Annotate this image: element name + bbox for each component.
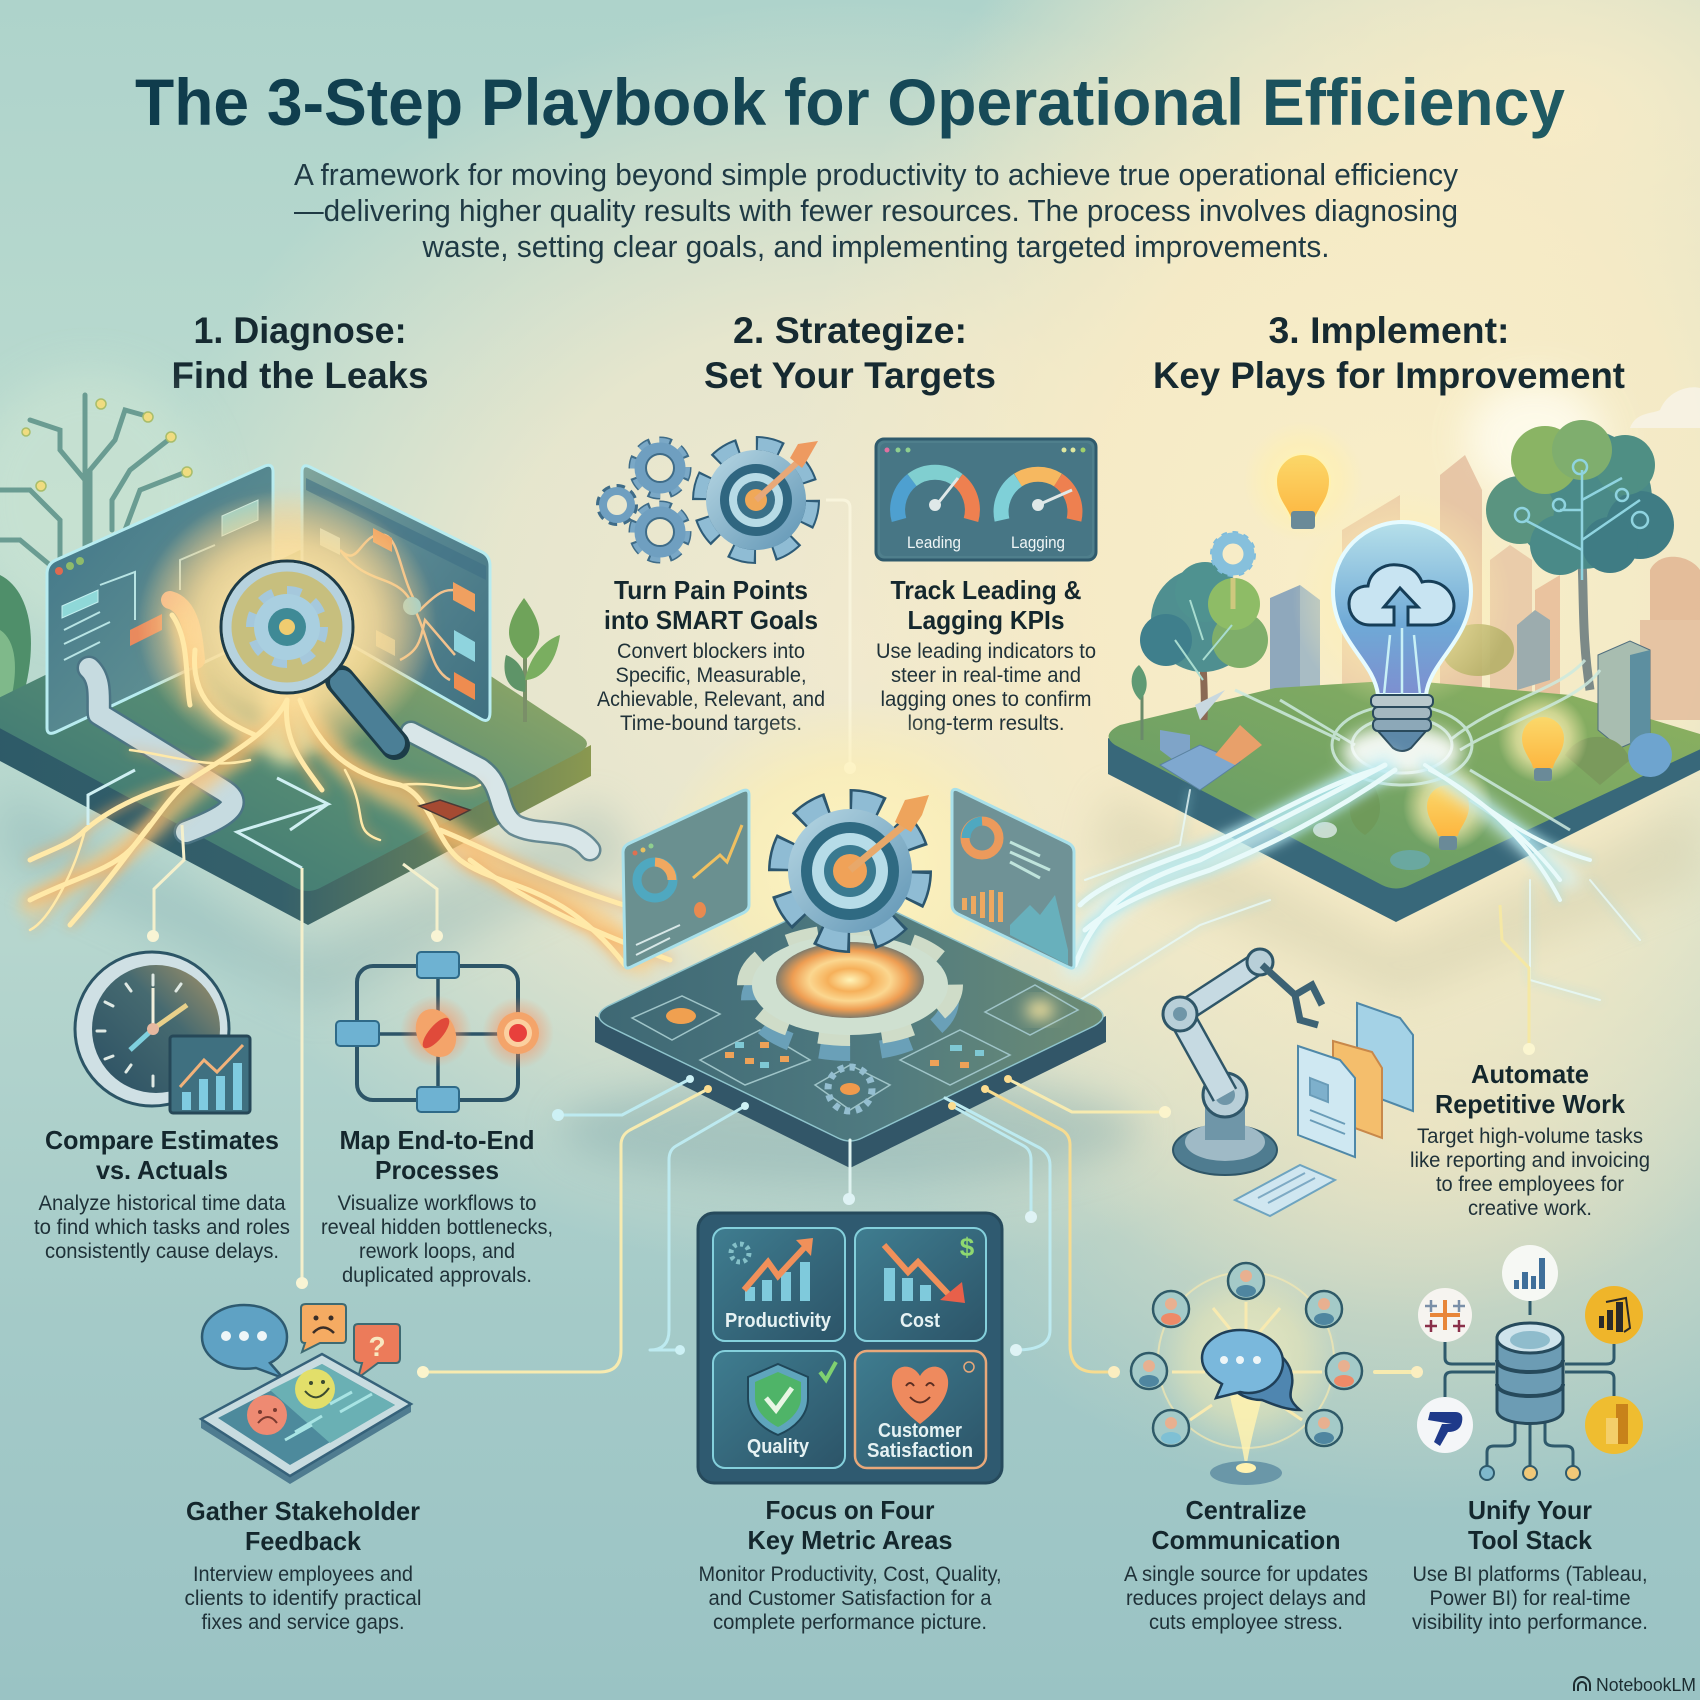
base gear — [746, 933, 954, 1052]
cell: productivity — [713, 1228, 845, 1341]
floor shadows — [0, 790, 1700, 1185]
text: unify tool stack: Unify Your — [1468, 1495, 1592, 1525]
icon: stakeholder feedback tablet: ? — [368, 1331, 386, 1362]
center platform with gear — [595, 700, 1106, 1168]
text: automate — [1410, 1059, 1650, 1220]
text: smart goals: Specific, Measurable, — [616, 664, 806, 687]
heading: step 1: Find the Leaks — [172, 355, 428, 396]
icon: leading lagging dashboard: Leading — [907, 533, 961, 552]
text: compare estimates: consistently cause delays. — [45, 1240, 279, 1263]
text: smart goals: into SMART Goals — [604, 605, 818, 635]
dashboard panel left — [623, 790, 749, 968]
lightning leaks — [30, 490, 670, 965]
connector lines step 1 — [147, 825, 443, 1289]
text: automate: Target high-volume tasks — [1417, 1125, 1643, 1148]
icon: unified tool stack — [1417, 1245, 1643, 1480]
icon: process map with bottlenecks — [336, 952, 554, 1112]
cell: customer satisfaction: Satisfaction — [867, 1440, 973, 1462]
cell: quality — [713, 1351, 845, 1468]
text: gather feedback: fixes and service gaps. — [202, 1611, 404, 1634]
heading: step 3: 3. Implement: — [1268, 310, 1510, 351]
text: map processes — [321, 1125, 553, 1287]
panel: four metric areas — [698, 1213, 1002, 1483]
intro text block: A framework for moving beyond simple productivity to achieve true operational efficiency — [294, 157, 1458, 192]
people avatars — [1131, 1263, 1362, 1446]
text: map processes: reveal hidden bottlenecks, — [321, 1216, 553, 1239]
small gear — [1215, 536, 1251, 609]
text: automate: to free employees for — [1436, 1173, 1624, 1196]
text: centralize communication: reduces project delays and — [1126, 1587, 1366, 1610]
text: compare estimates: to find which tasks and roles — [34, 1216, 290, 1239]
screen: left dashboard — [47, 465, 273, 733]
text: map processes: Processes — [375, 1155, 499, 1185]
text: map processes: Map End-to-End — [340, 1125, 534, 1155]
small bulb: bottom — [1403, 761, 1493, 851]
text: map processes: Visualize workflows to — [338, 1192, 536, 1215]
text: leading lagging kpis: Use leading indicators to — [876, 640, 1096, 663]
heading: step 2: 2. Strategize: — [733, 310, 967, 351]
text: compare estimates: Compare Estimates — [45, 1125, 279, 1155]
text: unify tool stack: Power BI) for real-time — [1430, 1587, 1630, 1610]
text: leading lagging kpis: steer in real-time and — [891, 664, 1081, 687]
text: gather feedback: Gather Stakeholder — [186, 1496, 420, 1526]
text: centralize communication: Communication — [1152, 1525, 1340, 1555]
text: four metric areas: Focus on Four — [766, 1495, 934, 1525]
connectors from center platform — [417, 1075, 1423, 1378]
text: compare estimates — [34, 1125, 290, 1263]
cell: productivity: Productivity — [725, 1310, 832, 1332]
text: smart goals: Achievable, Relevant, and — [597, 688, 825, 711]
intro text block: —delivering higher quality results with fewer resources. The process involves diagnosing — [294, 193, 1458, 228]
text: smart goals — [597, 575, 825, 735]
cell: cost: Cost — [900, 1310, 940, 1332]
text: leading lagging kpis: long-term results. — [908, 712, 1064, 735]
text: centralize communication — [1124, 1495, 1368, 1634]
text: gather feedback: clients to identify practical — [184, 1587, 422, 1610]
text: automate: creative work. — [1468, 1197, 1592, 1220]
platform: diagnose — [0, 550, 591, 925]
text: unify tool stack — [1412, 1495, 1648, 1634]
circuit lines on implement platform — [1235, 660, 1600, 840]
heading: step 1 — [172, 310, 428, 396]
text: centralize communication: Centralize — [1186, 1495, 1306, 1525]
connector: goals to gear — [826, 500, 856, 774]
text: centralize communication: cuts employee stress. — [1149, 1611, 1343, 1634]
text: leading lagging kpis: Track Leading & — [890, 575, 1082, 605]
heading: step 3: Key Plays for Improvement — [1153, 355, 1625, 396]
soft water glow — [1075, 765, 1570, 965]
cell: customer satisfaction: Customer — [878, 1420, 962, 1442]
magnifying glass — [221, 561, 395, 745]
text: leading lagging kpis: Lagging KPIs — [908, 605, 1064, 635]
cracks and circuit on platform — [88, 770, 470, 868]
text: leading lagging kpis: lagging ones to confirm — [880, 688, 1092, 711]
text: map processes: duplicated approvals. — [342, 1264, 532, 1287]
icon: stakeholder feedback tablet — [201, 1304, 411, 1484]
floating gear — [780, 795, 929, 941]
cell: customer satisfaction — [855, 1351, 986, 1468]
text: smart goals: Turn Pain Points — [614, 575, 808, 605]
text: smart goals: Time-bound targets. — [620, 712, 802, 735]
text: four metric areas: and Customer Satisfaction for a — [708, 1587, 992, 1610]
text: gather feedback: Interview employees and — [193, 1563, 413, 1586]
soft leak glow — [30, 620, 640, 960]
text: four metric areas — [698, 1495, 1002, 1634]
sun glow and cloud — [1465, 380, 1700, 500]
NotebookLM mark: NotebookLM — [1596, 1675, 1696, 1695]
text: gather feedback — [184, 1496, 422, 1634]
text: four metric areas: complete performance picture. — [713, 1611, 987, 1634]
text: four metric areas: Monitor Productivity, Cost, Quality, — [698, 1563, 1002, 1586]
illustration: circuit tree and plants — [0, 370, 210, 720]
dashboard panel right — [952, 789, 1074, 968]
icon: leading lagging dashboard — [876, 439, 1096, 560]
icon: clock with chart — [75, 952, 250, 1113]
screen: right process map — [302, 466, 490, 720]
cell: quality: Quality — [747, 1436, 810, 1458]
icon: centralized communication — [1131, 1263, 1362, 1485]
text: unify tool stack: visibility into performance. — [1412, 1611, 1648, 1634]
title: The 3-Step Playbook for Operational Efficiency — [135, 65, 1565, 139]
icon: robot arm and documents — [1163, 949, 1413, 1216]
text: unify tool stack: Tool Stack — [1468, 1525, 1593, 1555]
cell: cost: $ — [960, 1232, 975, 1262]
heading: step 2: Set Your Targets — [704, 355, 996, 396]
cell: cost — [855, 1228, 986, 1341]
text: map processes: rework loops, and — [359, 1240, 515, 1263]
illustration: trees and objects — [1132, 420, 1674, 870]
illustration: city and trees — [1270, 455, 1700, 720]
text: automate: Automate — [1471, 1059, 1589, 1089]
data streams: center to implement — [1075, 765, 1640, 1000]
platform: implement — [1108, 680, 1700, 922]
text: leading lagging kpis — [876, 575, 1096, 735]
icon: gears and target — [600, 441, 818, 558]
heading: step 1: 1. Diagnose: — [194, 310, 406, 351]
small bulb: right — [1498, 693, 1588, 783]
intro text block — [294, 157, 1458, 264]
text: compare estimates: vs. Actuals — [96, 1155, 228, 1185]
pipes — [89, 600, 590, 850]
heading: step 3 — [1153, 310, 1625, 396]
sprout — [504, 598, 560, 722]
text: centralize communication: A single source for updates — [1124, 1563, 1368, 1586]
text: smart goals: Convert blockers into — [617, 640, 805, 663]
icon: leading lagging dashboard: Lagging — [1011, 533, 1065, 552]
text: gather feedback: Feedback — [245, 1526, 362, 1556]
platform tiles — [632, 985, 1078, 1111]
text: four metric areas: Key Metric Areas — [748, 1525, 952, 1555]
main lightbulb with cloud — [1292, 490, 1512, 778]
text: compare estimates: Analyze historical time data — [38, 1192, 286, 1215]
intro text block: waste, setting clear goals, and implementing targeted improvements. — [422, 229, 1330, 264]
text: unify tool stack: Use BI platforms (Tableau, — [1412, 1563, 1648, 1586]
heading: step 2 — [704, 310, 996, 396]
small bulb: top — [1243, 421, 1363, 541]
text: automate: like reporting and invoicing — [1410, 1149, 1650, 1172]
connector: automate to platform — [1500, 905, 1535, 1055]
text: automate: Repetitive Work — [1435, 1089, 1626, 1119]
